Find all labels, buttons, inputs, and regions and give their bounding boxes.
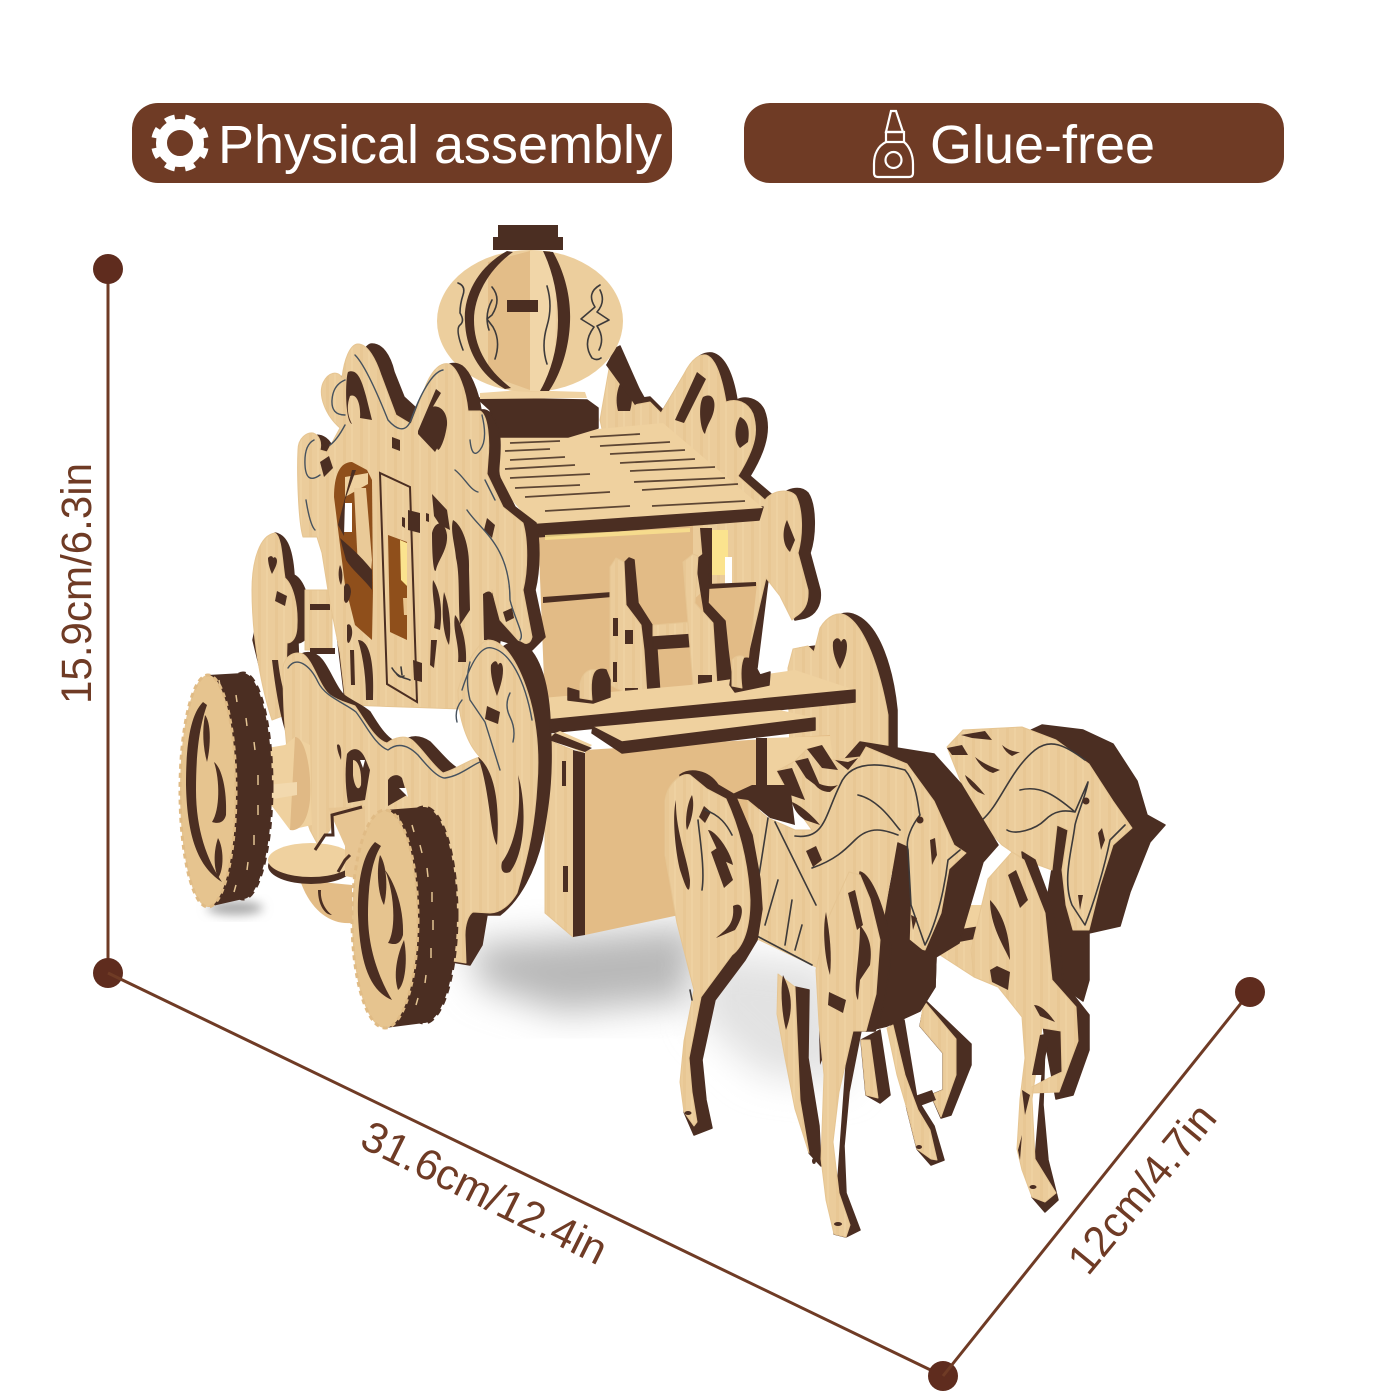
- lower side panel: [283, 640, 551, 965]
- rear wheel: [180, 673, 272, 907]
- back-left panel: [252, 533, 335, 745]
- horse: front: [665, 742, 1036, 1237]
- horse 1 far legs: [777, 974, 971, 1166]
- dimension: length: 31.6cm/12.4in: [354, 1112, 615, 1275]
- dimension: height: [53, 254, 123, 988]
- horse 2 front piece: [1022, 852, 1089, 1212]
- floor platform with mounts: [542, 656, 855, 733]
- horse 1 front piece: [834, 872, 890, 1237]
- icon: glue bottle: [874, 111, 913, 177]
- horse 1 body: [748, 747, 966, 970]
- horse 2 harness lines: [982, 744, 1125, 925]
- lower panel inlay: [288, 648, 532, 778]
- badge: physical assembly: [132, 103, 672, 183]
- horse 2 body: [937, 925, 980, 977]
- horse 1 harness lines: [752, 765, 960, 965]
- heart panel: [788, 613, 897, 760]
- horse 2 neck extrusion: [985, 725, 1165, 1001]
- dimension: length: [108, 973, 958, 1391]
- dimension: height: 15.9cm/6.3in: [53, 463, 101, 704]
- roof: [480, 423, 763, 540]
- door hinges: [402, 510, 429, 682]
- box body under floor: [545, 710, 835, 937]
- horse 1 back strip and mane: [726, 745, 858, 867]
- axle and step: [267, 737, 365, 923]
- door emblem: [392, 667, 410, 680]
- badge: glue-free: [744, 103, 1284, 183]
- horse: rear: [937, 725, 1165, 1212]
- badge text: physical assembly: Physical assembly: [218, 115, 662, 175]
- carriage: [180, 225, 897, 1028]
- door window: [388, 535, 407, 640]
- far ornate panel: [600, 346, 820, 690]
- panel inlay lines: [305, 355, 521, 640]
- horse 1 neck extrusion: [800, 742, 998, 1031]
- panel cutouts: [320, 371, 495, 538]
- door: [380, 473, 417, 702]
- seat: [610, 553, 733, 705]
- lantern: [437, 225, 645, 437]
- dimension: width: [943, 977, 1265, 1376]
- ground shadow: [207, 901, 850, 1085]
- icon: gear: [155, 118, 205, 168]
- horse 1 rump piece: [680, 771, 762, 1135]
- right fretwork: [339, 494, 514, 700]
- badge text: glue-free: Glue-free: [930, 115, 1155, 175]
- main side panel: [298, 344, 545, 710]
- back wall and seat base: [538, 520, 757, 705]
- front wheel: [352, 807, 457, 1028]
- horse 2 mane tufts: [947, 731, 1020, 795]
- horse 2 head and neck: [947, 727, 1132, 930]
- arched left window: [334, 462, 373, 640]
- lower panel cutouts: [337, 661, 524, 873]
- horse 1 slit and torso: [866, 843, 936, 1031]
- dimension: width: 12cm/4.7in: [1059, 1095, 1226, 1283]
